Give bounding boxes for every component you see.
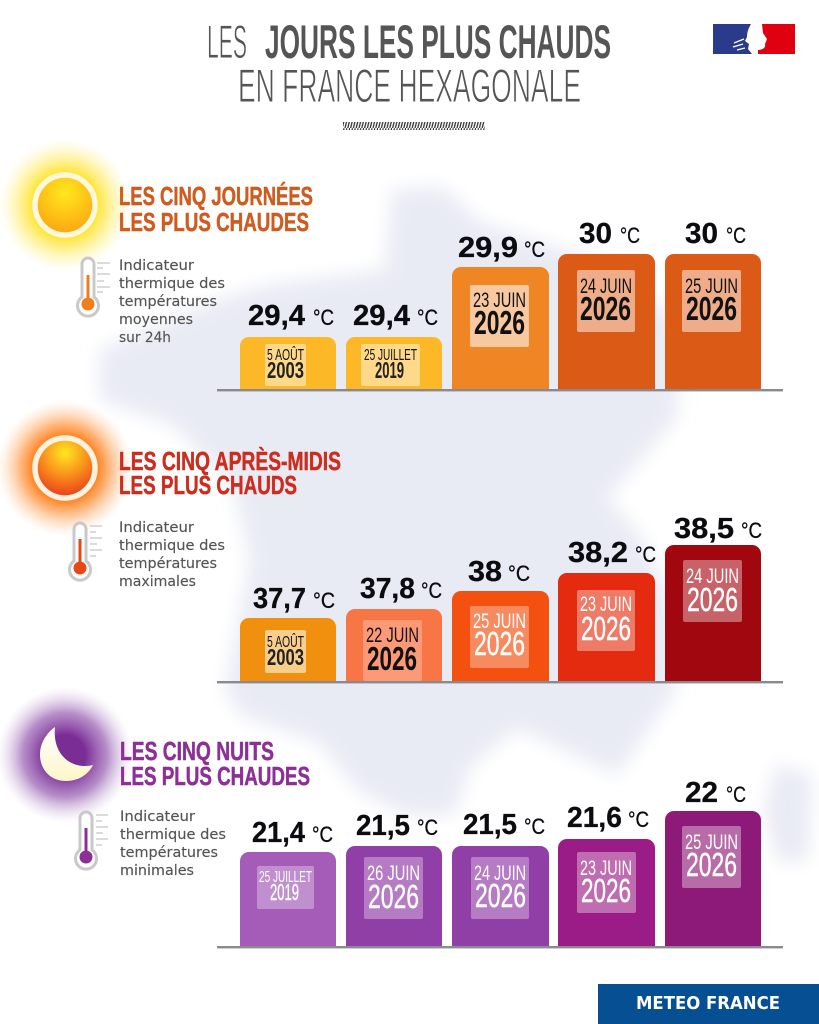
bar: 23 juin 2026: °C xyxy=(524,237,545,262)
indicator text: températures xyxy=(120,845,218,861)
indicator text: thermique des xyxy=(119,538,225,554)
bar: 24 juin 2026: 2026 xyxy=(475,877,526,914)
bar: 23 juin 2026 xyxy=(558,537,656,681)
bar: 25 juillet 2019: 25 JUILLET xyxy=(364,347,417,364)
bar: 25 juin 2026: 30 xyxy=(685,218,718,250)
title: LES xyxy=(207,15,247,68)
indicator text: thermique des xyxy=(119,276,225,292)
bar: 25 juin 2026: 25 JUIN xyxy=(685,275,738,298)
bar: 22 juin 2026: °C xyxy=(421,578,442,603)
indicator text: sur 24h xyxy=(119,330,171,346)
bar: 23 juin 2026 xyxy=(558,802,655,946)
background map of France xyxy=(100,187,812,862)
icon: thermometer red xyxy=(70,523,102,580)
bar: 24 juin 2026: 24 JUIN xyxy=(686,565,739,588)
bar: 25 juillet 2019: 2019 xyxy=(375,357,404,383)
bar: 24 juin 2026: 2026 xyxy=(580,290,631,327)
bar: 23 juin 2026: 2026 xyxy=(474,304,525,341)
bar: 25 juillet 2019: 21,4 xyxy=(252,817,305,849)
bar: 25 juin 2026 xyxy=(665,777,761,946)
bar: 23 juin 2026: 21,6 xyxy=(567,802,622,834)
bar: 5 août 2003 xyxy=(240,583,336,681)
bar: 23 juin 2026 xyxy=(452,232,549,389)
indicator text: maximales xyxy=(119,574,196,590)
bar: 23 juin 2026: 23 JUIN xyxy=(473,289,526,312)
bar: 26 juin 2026: 21,5 xyxy=(356,810,410,842)
bar: 26 juin 2026: 2026 xyxy=(368,878,419,915)
bar: 25 juin 2026: 2026 xyxy=(686,290,737,327)
bar: 24 juin 2026: 2026 xyxy=(687,581,738,618)
bar: 5 août 2003: 29,4 xyxy=(248,300,305,332)
indicator text: températures xyxy=(119,294,217,310)
bar: 25 juin 2026: °C xyxy=(726,782,746,807)
heading: days: LES CINQ JOURNÉES xyxy=(119,181,313,211)
bar: 23 juin 2026: 2026 xyxy=(581,872,631,909)
logo: République française xyxy=(713,24,795,54)
chart: afternoons xyxy=(217,513,783,683)
icon: orange sun xyxy=(0,400,133,536)
indicator text: Indicateur xyxy=(119,258,194,274)
icon: crescent moon xyxy=(0,687,133,823)
bar: 25 juillet 2019 xyxy=(240,817,336,946)
bar: 23 juin 2026: 23 JUIN xyxy=(580,593,632,616)
icon: yellow sun xyxy=(0,139,131,271)
bar: 25 juillet 2019: 29,4 xyxy=(353,300,410,332)
indicator text: minimales xyxy=(120,863,194,879)
bar: 25 juin 2026: 25 JUIN xyxy=(685,831,738,854)
bar: 24 juin 2026: °C xyxy=(524,814,545,839)
bar: 24 juin 2026 xyxy=(665,513,762,681)
indicator text: thermique des xyxy=(120,827,226,843)
bar: 5 août 2003: °C xyxy=(313,588,335,613)
bar: 26 juin 2026 xyxy=(346,810,442,946)
bar: 5 août 2003: 5 AOÛT xyxy=(267,632,304,651)
bar: 22 juin 2026 xyxy=(346,573,442,681)
bar: 5 août 2003 xyxy=(240,300,336,389)
bar: 25 juin 2026: 2026 xyxy=(474,625,525,662)
indicator text: moyennes xyxy=(119,312,193,328)
heading: days: LES PLUS CHAUDES xyxy=(119,207,309,237)
indicator text: Indicateur xyxy=(120,809,195,825)
bar: 25 juin 2026: 22 xyxy=(685,777,718,809)
indicator text: Indicateur xyxy=(119,520,194,536)
chart: nights xyxy=(217,777,783,948)
bar: 23 juin 2026: 38,2 xyxy=(568,537,628,569)
heading: afternoons: LES CINQ APRÈS-MIDIS xyxy=(119,446,341,476)
bar: 23 juin 2026: °C xyxy=(635,542,656,567)
bar: 25 juillet 2019 xyxy=(346,300,442,389)
bar: 25 juin 2026: °C xyxy=(726,223,746,248)
bar: 24 juin 2026: 30 xyxy=(579,218,612,250)
bar: 25 juillet 2019: °C xyxy=(312,822,333,847)
heading: nights: LES PLUS CHAUDES xyxy=(120,761,310,791)
bar: 25 juin 2026: 2026 xyxy=(686,846,737,883)
bar: 24 juin 2026 xyxy=(452,809,549,946)
panel: five hottest afternoons xyxy=(0,400,783,683)
chart: days xyxy=(217,218,783,391)
bar: 25 juin 2026 xyxy=(665,218,761,389)
bar: 24 juin 2026: °C xyxy=(741,518,762,543)
bar: 25 juillet 2019: °C xyxy=(417,305,438,330)
bar: 23 juin 2026: 23 JUIN xyxy=(580,857,632,880)
bar: 25 juin 2026: 38 xyxy=(468,556,502,588)
bar: 5 août 2003: 2003 xyxy=(267,357,304,383)
bar: 25 juillet 2019: 25 JUILLET xyxy=(259,869,312,886)
bar: 23 juin 2026: °C xyxy=(628,807,649,832)
bar: 22 juin 2026: 37,8 xyxy=(360,573,415,605)
bar: 22 juin 2026: 2026 xyxy=(367,640,417,677)
bar: 5 août 2003: °C xyxy=(313,305,334,330)
bar: 22 juin 2026: 22 JUIN xyxy=(366,624,419,647)
bar: 24 juin 2026: 38,5 xyxy=(674,513,734,545)
bar: 5 août 2003: 2003 xyxy=(267,644,304,670)
bar: 5 août 2003: 5 AOÛT xyxy=(267,345,304,364)
bar: 25 juin 2026 xyxy=(452,556,549,681)
indicator text xyxy=(119,520,225,590)
icon: thermometer orange xyxy=(78,258,110,316)
bar: 25 juillet 2019: 2019 xyxy=(270,879,299,905)
indicator text xyxy=(120,809,226,879)
bar: 24 juin 2026: 24 JUIN xyxy=(474,862,526,885)
bar: 25 juin 2026: °C xyxy=(508,561,530,586)
footer: Météo France banner: METEO FRANCE xyxy=(636,993,780,1014)
bar: 26 juin 2026: °C xyxy=(417,815,438,840)
bar: 26 juin 2026: 26 JUIN xyxy=(367,862,420,885)
indicator text xyxy=(119,258,225,346)
bar: 23 juin 2026: 2026 xyxy=(581,610,631,647)
footer: Météo France banner xyxy=(598,984,819,1024)
bar: 24 juin 2026: °C xyxy=(620,223,640,248)
heading: afternoons xyxy=(119,446,341,500)
indicator text: températures xyxy=(119,556,217,572)
bar: 24 juin 2026 xyxy=(558,218,655,389)
heading: days xyxy=(119,181,313,237)
bar: 24 juin 2026: 24 JUIN xyxy=(580,275,632,298)
icon: thermometer purple xyxy=(76,812,108,869)
bar: 23 juin 2026: 29,9 xyxy=(458,232,518,264)
heading: nights xyxy=(120,736,310,791)
title xyxy=(207,15,611,112)
panel: five hottest days xyxy=(0,139,783,391)
heading: afternoons: LES PLUS CHAUDS xyxy=(119,470,297,500)
bar: 24 juin 2026: 21,5 xyxy=(463,809,517,841)
bar: 25 juin 2026: 25 JUIN xyxy=(473,610,526,633)
heading: nights: LES CINQ NUITS xyxy=(120,736,274,766)
bar: 5 août 2003: 37,7 xyxy=(253,583,306,615)
panel: five hottest nights xyxy=(0,687,783,948)
